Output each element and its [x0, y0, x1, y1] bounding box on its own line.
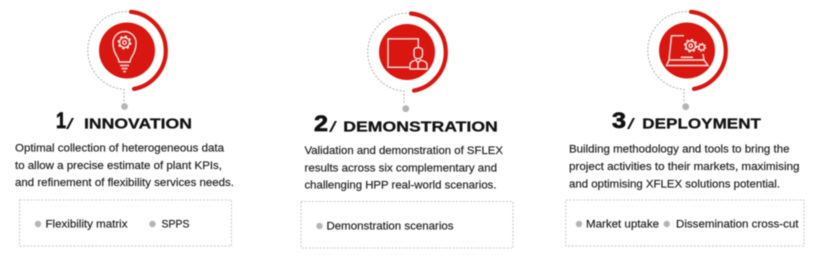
heading: 1/ innovation: /: [66, 116, 76, 133]
heading: 2/ demonstration: /: [329, 119, 339, 136]
callout: innovation outputs: [20, 200, 232, 246]
heading: 3/ deployment: DEPLOYMENT: [642, 116, 761, 132]
heading: 1/ innovation: 1: [56, 108, 66, 133]
callout: innovation outputs: Flexibility matrix: [46, 219, 128, 231]
panel: deployment: [566, 11, 804, 246]
icon: lightbulb with gear in ring: [88, 11, 166, 103]
callout: deployment outputs: Market uptake: [586, 219, 659, 231]
text block: innovation description: and refinement of flexibility services needs.: [15, 177, 234, 189]
text block: demonstration description: results across six complementary and: [304, 162, 497, 174]
panel: demonstration: [301, 13, 513, 248]
icon: presenter at screen in ring: [368, 13, 446, 105]
text block: deployment description: [569, 144, 800, 190]
text block: deployment description: project activities to their markets, maximising: [569, 161, 800, 173]
text block: demonstration description: challenging HPP real-world scenarios.: [304, 180, 496, 192]
connector dot: [121, 103, 128, 110]
heading: 3/ deployment: /: [627, 116, 637, 133]
heading: 1/ innovation: INNOVATION: [84, 116, 192, 132]
text block: innovation description: to allow a precise estimate of plant KPIs,: [15, 160, 222, 172]
connector dot: [402, 105, 409, 112]
text block: demonstration description: [304, 145, 504, 192]
callout: deployment outputs: Dissemination cross-cut: [676, 219, 799, 231]
heading: 2/ demonstration: 2: [314, 111, 328, 136]
text block: innovation description: Optimal collection of heterogeneous data: [15, 142, 225, 154]
heading: 2/ demonstration: DEMONSTRATION: [343, 119, 498, 135]
heading: 3/ deployment: 3: [612, 108, 626, 133]
heading: 2/ demonstration: [314, 111, 498, 136]
callout: deployment outputs: [566, 200, 804, 246]
text block: demonstration description: Validation and demonstration of SFLEX: [304, 145, 504, 157]
text block: deployment description: Building methodology and tools to bring the: [569, 144, 790, 156]
panel: innovation: [15, 11, 234, 246]
text block: innovation description: [15, 142, 234, 189]
text block: deployment description: and optimising XFLEX solutions potential.: [569, 178, 780, 190]
heading: 1/ innovation: [56, 108, 192, 133]
connector dot: [682, 103, 689, 110]
callout: demonstration outputs: Demonstration scenarios: [326, 221, 454, 233]
heading: 3/ deployment: [612, 108, 761, 133]
callout: demonstration outputs: [301, 202, 513, 248]
callout: innovation outputs: SPPS: [162, 219, 190, 231]
icon: laptop with gears in ring: [648, 11, 726, 103]
